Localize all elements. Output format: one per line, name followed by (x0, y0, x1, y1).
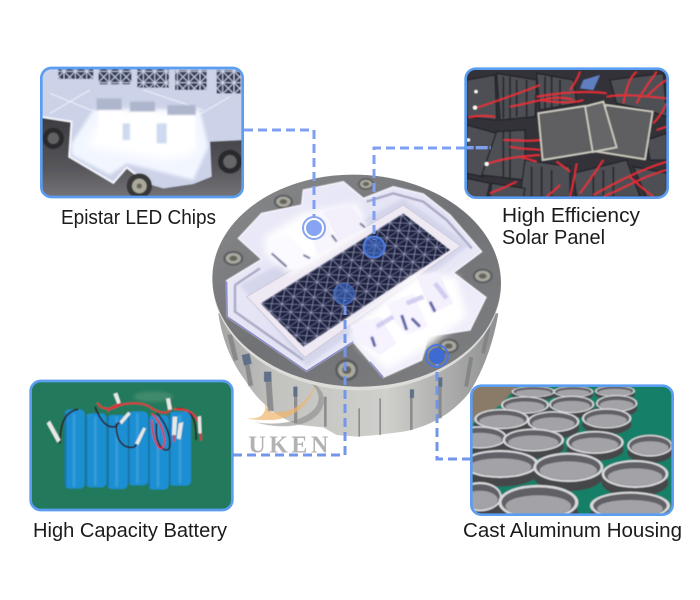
panel: battery photo (30, 380, 233, 511)
road stud product (209, 170, 505, 459)
body fins (227, 327, 491, 437)
dashed connector: LED chips (244, 130, 314, 220)
caption: High Efficiency Solar Panel: High Efficiency (502, 205, 640, 227)
caption: High Capacity Battery: High Capacity Battery (33, 520, 227, 542)
top ring (209, 170, 505, 395)
lens background (42, 69, 242, 188)
marker: solar panel (364, 236, 384, 258)
watermark logo (247, 377, 328, 459)
stacked small panels (467, 73, 667, 197)
cell shading (65, 413, 171, 487)
caption: Cast Aluminum Housing: Cast Aluminum Housing (463, 520, 682, 542)
marker: battery (334, 284, 354, 304)
solar panel frame (247, 205, 461, 357)
solar lattice strip (58, 68, 241, 94)
fin tops (242, 353, 442, 398)
cast aluminum body (218, 313, 498, 437)
red wires (97, 403, 201, 448)
screws (43, 128, 242, 199)
dashed connector: battery (233, 300, 345, 455)
panel: LED chips photo (40, 67, 247, 200)
LED blocks (97, 98, 196, 147)
LED group top left (265, 203, 367, 273)
caption: Epistar LED Chips: Epistar LED Chips (61, 207, 216, 229)
lens inner edge (235, 193, 472, 360)
lens shadow under solar panel (240, 198, 470, 367)
dark housing (40, 117, 243, 200)
housing rings (472, 387, 672, 514)
black wires (60, 407, 196, 450)
battery cells (65, 409, 191, 490)
dashed connector: solar panel (374, 148, 465, 240)
marker: housing (426, 345, 448, 367)
solar panel cells (261, 213, 450, 347)
panel: solar panel photo (462, 68, 668, 199)
glow (72, 110, 208, 180)
red wires (468, 72, 667, 197)
panel: aluminum housing photo (470, 384, 674, 516)
watermark logo: UKEN (248, 433, 328, 459)
lens outer blue edge (227, 282, 383, 377)
panel ribs (503, 77, 613, 197)
connector overlap (467, 146, 491, 150)
lattice faint ribs (50, 90, 230, 114)
caption: High Efficiency Solar Panel (502, 205, 640, 249)
clear lens (227, 182, 486, 377)
white terminals (467, 90, 489, 166)
green mat (30, 380, 233, 511)
LED group bottom right (350, 272, 467, 370)
caption: High Efficiency Solar Panel: Solar Panel (502, 227, 605, 249)
mounting screws (223, 178, 493, 381)
dark background (465, 68, 668, 199)
green floor and wall (470, 385, 673, 516)
marker: LED chips (303, 217, 325, 239)
white terminals (47, 393, 202, 445)
sky gap (580, 75, 600, 90)
large solar cells (538, 102, 653, 160)
dashed connector: housing (437, 362, 471, 459)
